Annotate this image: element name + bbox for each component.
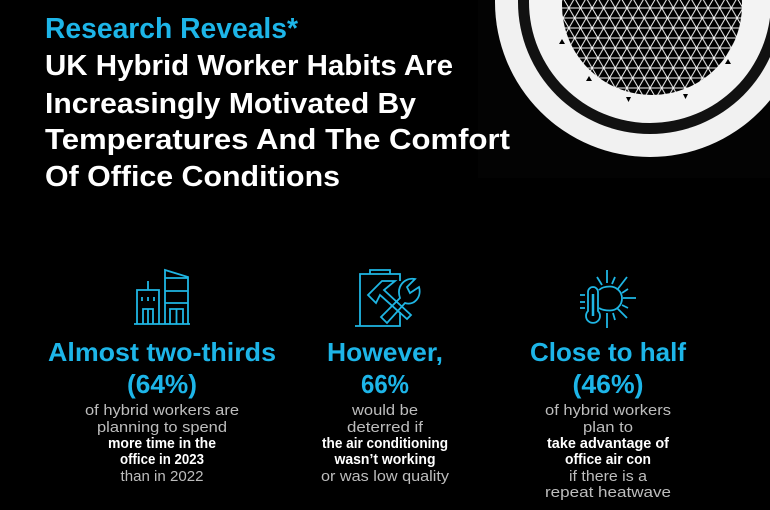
description: heatwave: take advantage of: [547, 436, 669, 452]
description: heatwave: plan to: [583, 419, 633, 436]
panel: more time in office: [48, 270, 276, 485]
description: deterred: would be: [351, 402, 418, 419]
description: more time in office: more time in the: [108, 436, 216, 452]
description: more time in office: [85, 402, 239, 485]
title: UK Hybrid Worker Habits Are: [45, 50, 453, 82]
title: Temperatures And The Comfort: [45, 124, 510, 156]
description: deterred: [321, 402, 450, 485]
title: Of Office Conditions: [45, 161, 340, 193]
stat value: 46%: (46%): [572, 369, 644, 399]
icon: thermometer and sun: [580, 270, 636, 328]
panel: heatwave: [530, 270, 686, 501]
description: heatwave: of hybrid workers: [545, 402, 671, 419]
icon: office buildings: [134, 270, 190, 324]
description: heatwave: office air con: [565, 452, 651, 468]
description: heatwave: [545, 402, 671, 501]
stat value: 64%: (64%): [127, 369, 197, 399]
stat heading: almost two-thirds: Almost two-thirds: [48, 337, 276, 367]
description: deterred: wasn’t working: [334, 452, 436, 468]
title: Increasingly Motivated By: [45, 88, 416, 120]
description: deterred: or was low quality: [321, 468, 450, 485]
description: heatwave: repeat heatwave: [545, 484, 671, 501]
title: [45, 50, 510, 193]
panel: deterred by poor air con: [321, 270, 450, 485]
description: deterred: deterred if: [347, 419, 424, 436]
stat value: 66%: 66%: [361, 369, 409, 399]
icon: clipboard with hammer and wrench: [355, 270, 420, 326]
heading: research reveals: Research Reveals*: [45, 13, 299, 45]
description: more time in office: office in 2023: [120, 452, 204, 468]
description: heatwave: if there is a: [569, 468, 648, 485]
stat heading: however: However,: [327, 337, 443, 367]
description: deterred: the air conditioning: [322, 436, 448, 452]
description: more time in office: than in 2022: [120, 468, 204, 485]
description: more time in office: planning to spend: [97, 419, 227, 436]
description: more time in office: of hybrid workers are: [85, 402, 239, 419]
stat heading: close to half: Close to half: [530, 337, 686, 367]
photo: air conditioner cassette: [495, 0, 770, 157]
